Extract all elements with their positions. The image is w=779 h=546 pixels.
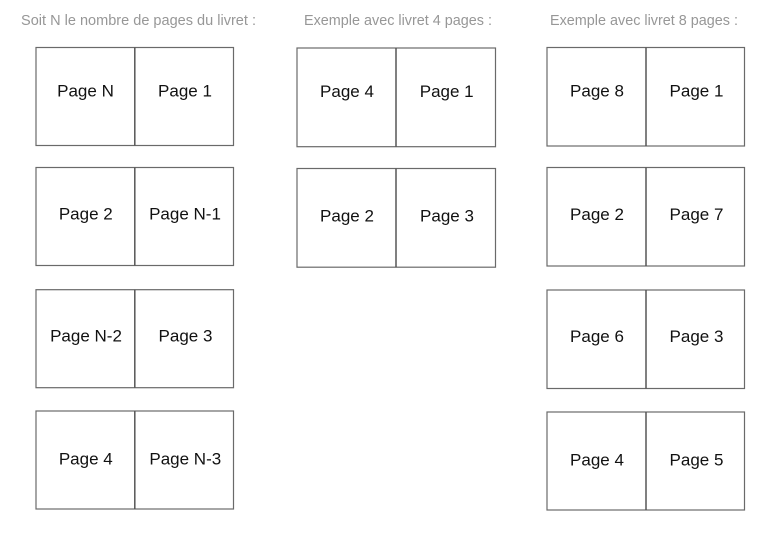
spread: Page 2 / Page 7 bbox=[547, 168, 744, 266]
spread: Page 2 / Page 7: Page 7 bbox=[670, 205, 723, 224]
spread: Page 2 / Page N-1 bbox=[36, 168, 234, 266]
heading: general case: Soit N le nombre de pages du livret : bbox=[21, 13, 256, 29]
spread: Page 8 / Page 1: Page 1 bbox=[670, 82, 723, 101]
spread: Page 2 / Page 3: Page 3 bbox=[420, 206, 474, 225]
spread: Page 8 / Page 1 bbox=[547, 48, 744, 146]
spread: Page 2 / Page N-1: Page 2 bbox=[59, 205, 113, 224]
spread: Page 2 / Page 7: Page 2 bbox=[570, 205, 624, 224]
spread: Page 6 / Page 3: Page 6 bbox=[570, 327, 624, 346]
spread: Page 2 / Page 3 bbox=[297, 168, 496, 267]
heading: 4-page example: Exemple avec livret 4 pages : bbox=[304, 13, 492, 29]
spread: Page 4 / Page 5 bbox=[547, 412, 744, 510]
spread: Page 4 / Page 1 bbox=[297, 48, 496, 147]
column: general case spreads bbox=[36, 48, 234, 509]
spread: Page 4 / Page 5: Page 5 bbox=[670, 451, 723, 470]
spread: Page 2 / Page 3: Page 2 bbox=[320, 206, 374, 225]
column: 8-page example spreads bbox=[547, 48, 744, 510]
spread: Page N-2 / Page 3: Page N-2 bbox=[50, 326, 122, 346]
spread: Page N / Page 1: Page N bbox=[57, 82, 114, 101]
spread: Page N-2 / Page 3 bbox=[36, 290, 234, 388]
spread: Page 4 / Page N-3: Page N-3 bbox=[149, 449, 221, 468]
spread: Page 4 / Page 1: Page 4 bbox=[320, 82, 374, 101]
spread: Page 4 / Page 1: Page 1 bbox=[420, 82, 474, 101]
spread: Page 8 / Page 1: Page 8 bbox=[570, 82, 624, 101]
column: 4-page example spreads bbox=[297, 48, 496, 267]
spread: Page 4 / Page N-3 bbox=[36, 411, 234, 509]
spread: Page 4 / Page 5: Page 4 bbox=[570, 451, 624, 470]
spread: Page 6 / Page 3: Page 3 bbox=[670, 327, 723, 346]
spread: Page N-2 / Page 3: Page 3 bbox=[159, 326, 212, 346]
spread: Page 2 / Page N-1: Page N-1 bbox=[149, 205, 221, 224]
spread: Page N / Page 1 bbox=[36, 48, 234, 146]
spread: Page 6 / Page 3 bbox=[547, 290, 744, 388]
heading: 8-page example: Exemple avec livret 8 pages : bbox=[550, 13, 738, 29]
spread: Page N / Page 1: Page 1 bbox=[158, 82, 212, 101]
spread: Page 4 / Page N-3: Page 4 bbox=[59, 449, 113, 468]
